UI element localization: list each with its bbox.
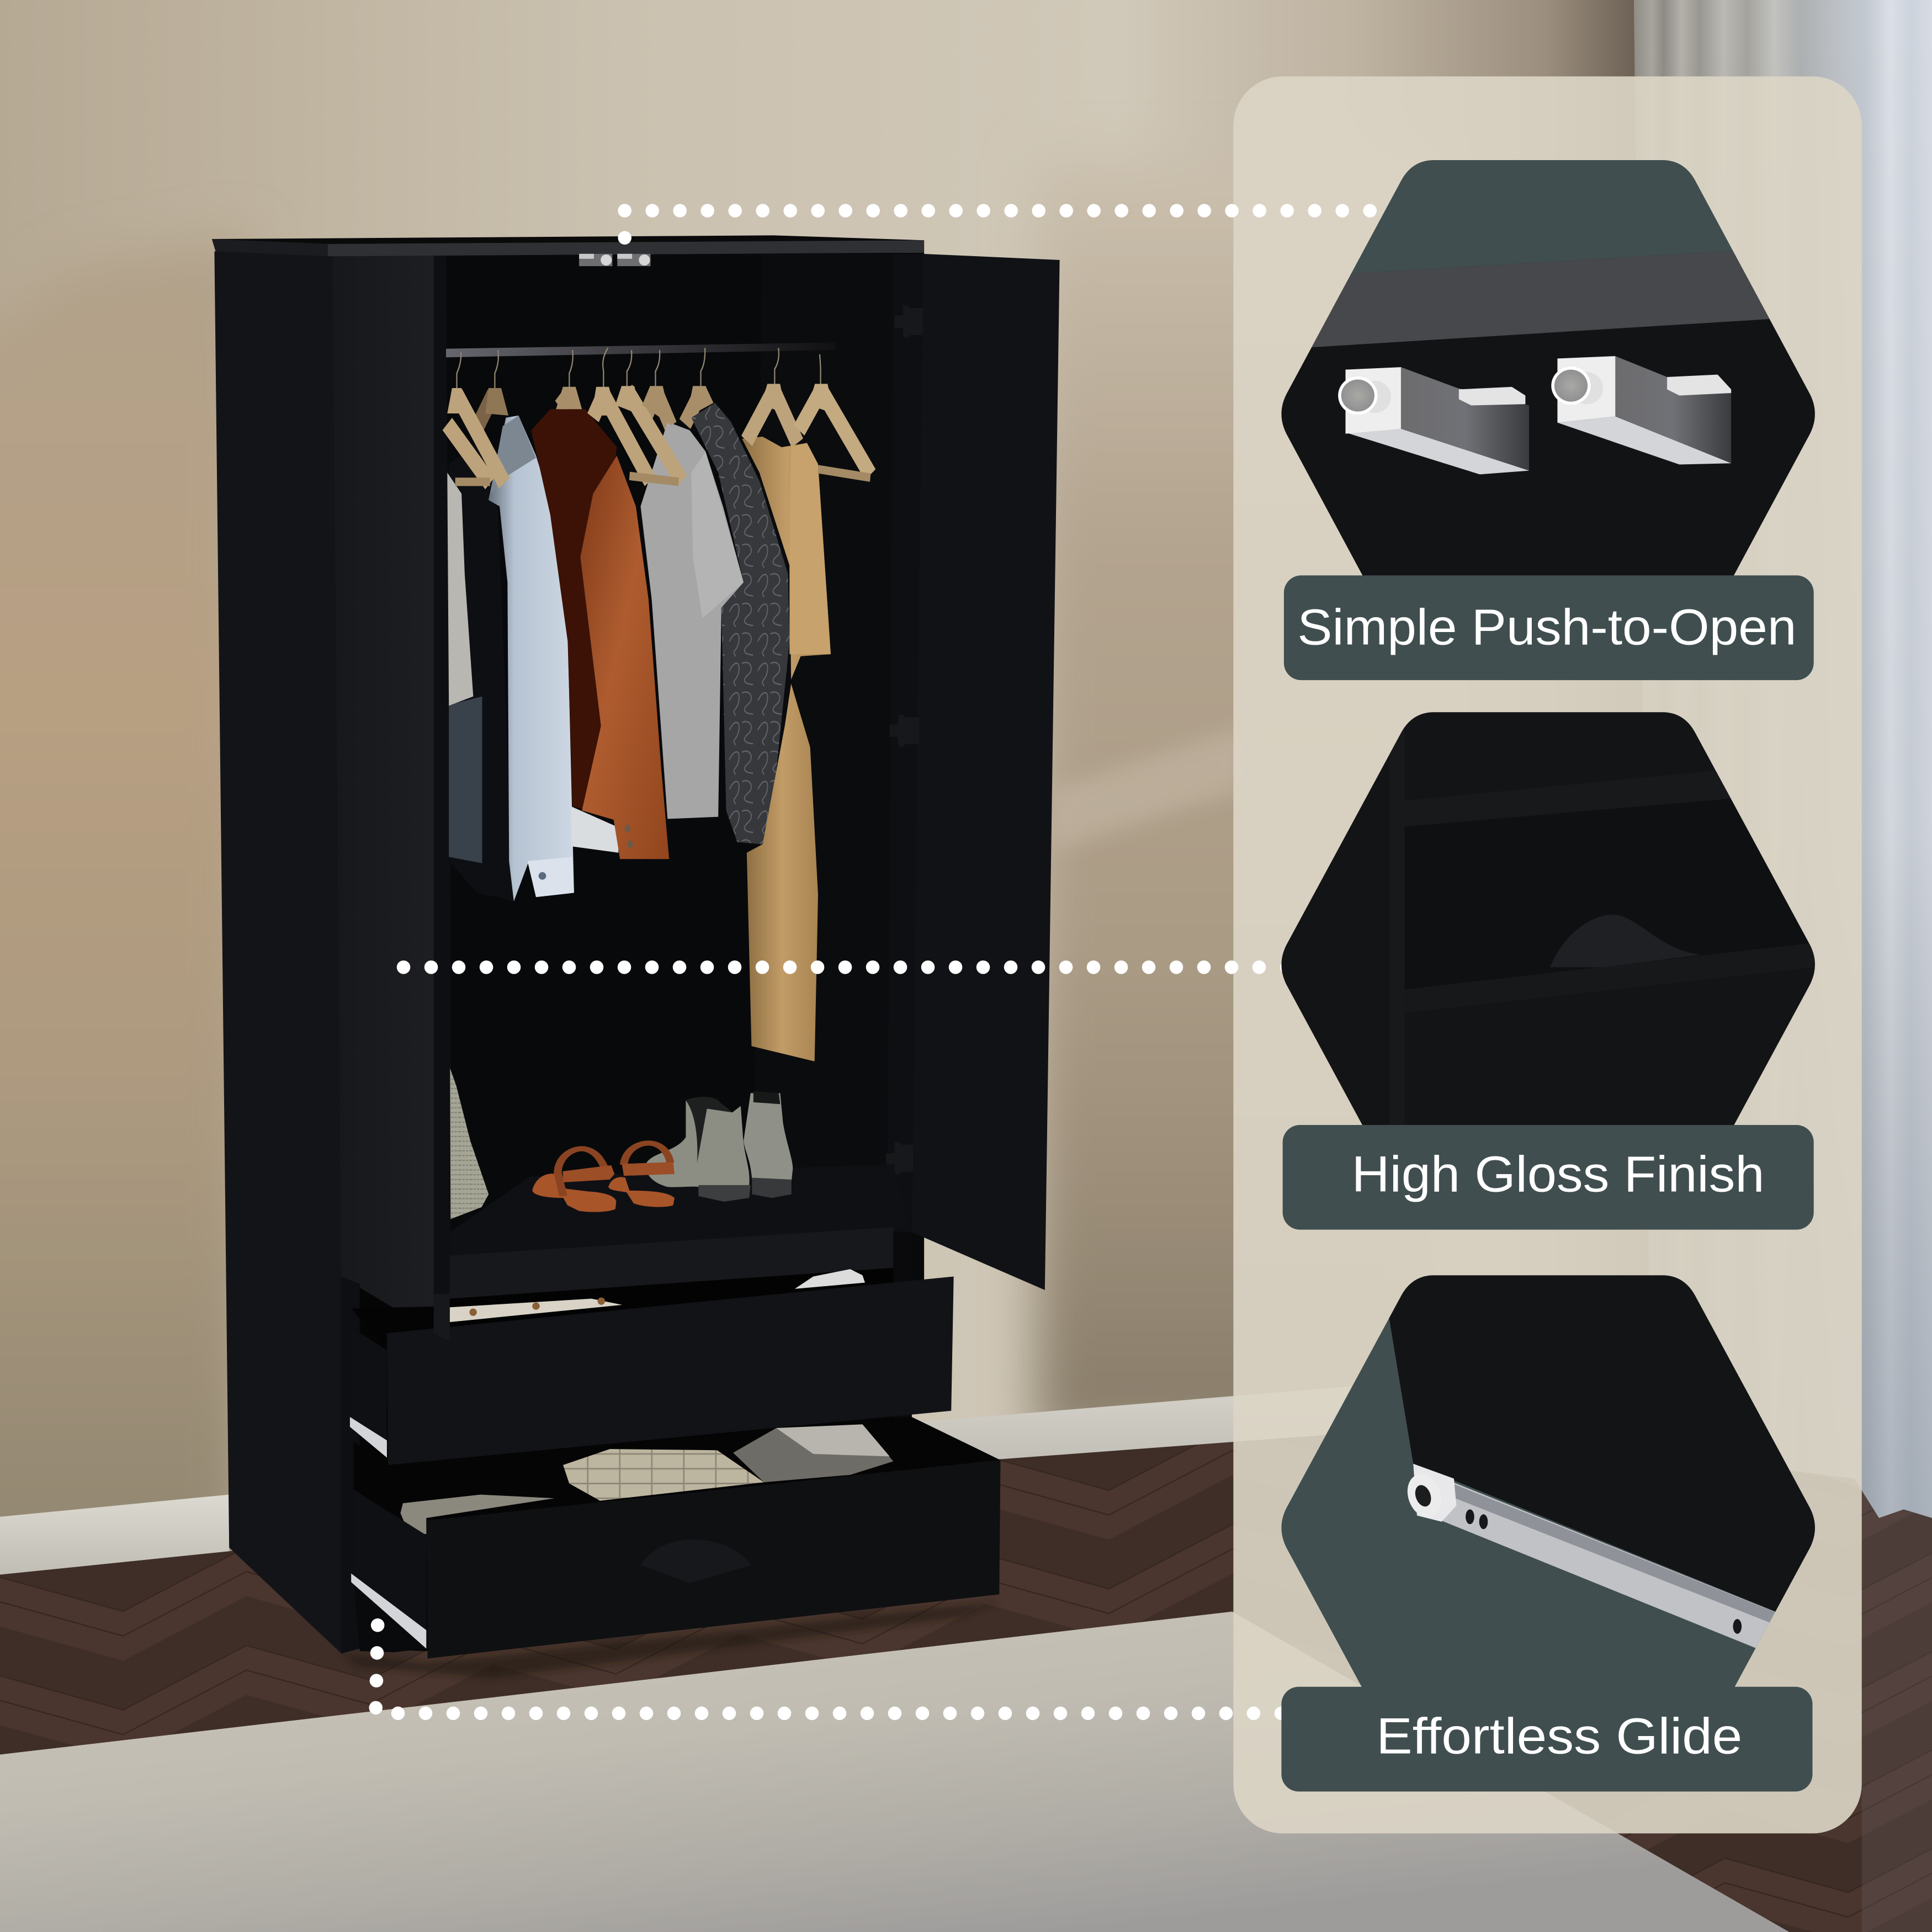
- lower drawer contents: [400, 1424, 893, 1534]
- gloss band upper: [1402, 758, 1848, 827]
- grey polo shirt: [640, 422, 744, 819]
- wardrobe top board: [212, 235, 924, 256]
- right sandal: [608, 1143, 675, 1207]
- feature 3 hexagon: drawer slide: [1269, 1263, 1848, 1787]
- interior back: [434, 253, 924, 1343]
- hangers in front of clothes: [447, 390, 871, 483]
- floral shirt: [691, 403, 789, 844]
- upper drawer contents: [450, 1269, 865, 1322]
- shirt collar: [490, 416, 536, 493]
- shirt lower left: [449, 697, 482, 863]
- vertical edge: [1390, 702, 1405, 1220]
- gap above upper drawer: [450, 1268, 893, 1343]
- left door overlap at drawer: [434, 1294, 450, 1342]
- label: Simple Push-to-Open: [1284, 575, 1814, 680]
- rail holes: [1466, 1509, 1474, 1524]
- wardrobe shadow on left wall: [0, 234, 246, 1602]
- translucent features panel: [1233, 76, 1862, 1833]
- slide rail: [1402, 1464, 1848, 1686]
- lower left post: [341, 1276, 360, 1654]
- shirt cuff: [528, 857, 574, 897]
- rug: [0, 1612, 1789, 1932]
- gloss panel middle: [1402, 770, 1848, 1004]
- grey floor tint right: [1862, 1479, 1932, 1932]
- left boot: [646, 1097, 751, 1202]
- right boot: [744, 1091, 793, 1198]
- polo sleeve: [691, 452, 744, 618]
- shaded wall right of wardrobe: [1035, 160, 1442, 1442]
- gloss reflection: [641, 1540, 752, 1583]
- top push latches: [579, 254, 651, 266]
- upper drawer: [350, 1276, 954, 1465]
- feature 2 hexagon: high gloss surface: [1282, 712, 1815, 1125]
- dotted connector: high gloss: [404, 964, 1289, 970]
- lower right post: [893, 1232, 912, 1448]
- open right door: [912, 254, 1060, 1290]
- dark shirt: [449, 443, 514, 901]
- sunlight streak on wall: [1053, 727, 1244, 850]
- dotted connector: glide: [369, 1618, 1284, 1715]
- bag and shoes: [450, 1068, 793, 1219]
- leather sleeve: [580, 455, 669, 859]
- curtain: [1634, 0, 1932, 1518]
- faint shoe reflection: [1550, 915, 1700, 967]
- teal top wall: [1351, 160, 1733, 274]
- cast shadow under wardrobe: [341, 1602, 999, 1678]
- right door inner edge: [887, 254, 923, 1244]
- jacket cuff buttons: [625, 825, 633, 848]
- label: Simple Push-to-Open: Simple Push-to-Open: [1297, 599, 1796, 655]
- open left door: [333, 251, 450, 1342]
- lower drawer interior: [354, 1417, 1000, 1520]
- black drawer underside: [1380, 1263, 1848, 1641]
- label: Effortless Glide: Effortless Glide: [1376, 1708, 1742, 1764]
- label: High Gloss Finish: [1283, 1125, 1814, 1230]
- woven bag: [450, 1068, 489, 1219]
- hanger bars: [455, 469, 871, 482]
- latch 2: [1551, 356, 1731, 465]
- rail wheel: [1402, 1469, 1447, 1522]
- label: High Gloss Finish: High Gloss Finish: [1352, 1146, 1764, 1202]
- tan dress skirt: [747, 684, 818, 1061]
- hanging rod: [446, 343, 835, 357]
- curtain shading: [1634, 0, 1932, 1518]
- white-blue shirt: [489, 416, 574, 901]
- label: Effortless Glide: [1281, 1687, 1812, 1792]
- wooden floor: [0, 1411, 1932, 1932]
- dress sleeve highlight: [789, 443, 831, 654]
- clothes and hangers: [447, 348, 871, 1061]
- latch 1: [1338, 367, 1529, 474]
- lower body backing: [341, 1220, 912, 1654]
- hanger heads: [447, 384, 834, 426]
- hangers behind clothes: [476, 392, 701, 431]
- grey top board: [1312, 251, 1770, 348]
- door hinges: [886, 306, 923, 1174]
- interior right wall: [754, 254, 912, 1232]
- rail bracket: [1413, 1464, 1456, 1522]
- right baseboard: [906, 1362, 1651, 1466]
- shelf: [450, 1164, 909, 1299]
- hanger hooks: [457, 348, 821, 388]
- side panel: [214, 251, 357, 1654]
- left sandal: [532, 1149, 616, 1212]
- dotted connector: push-to-open: [618, 211, 1371, 245]
- gloss band lower: [1405, 939, 1848, 1013]
- left baseboard: [0, 1495, 229, 1575]
- white undershirt: [571, 806, 618, 853]
- left door thickness: [434, 253, 451, 1342]
- tan dress top: [742, 437, 831, 680]
- lower drawer: [351, 1460, 1001, 1658]
- light grey shirt: [447, 473, 473, 705]
- feature 1 hexagon: push latches: [1282, 160, 1815, 575]
- leather jacket back: [531, 409, 617, 819]
- wardrobe: [212, 235, 1060, 1678]
